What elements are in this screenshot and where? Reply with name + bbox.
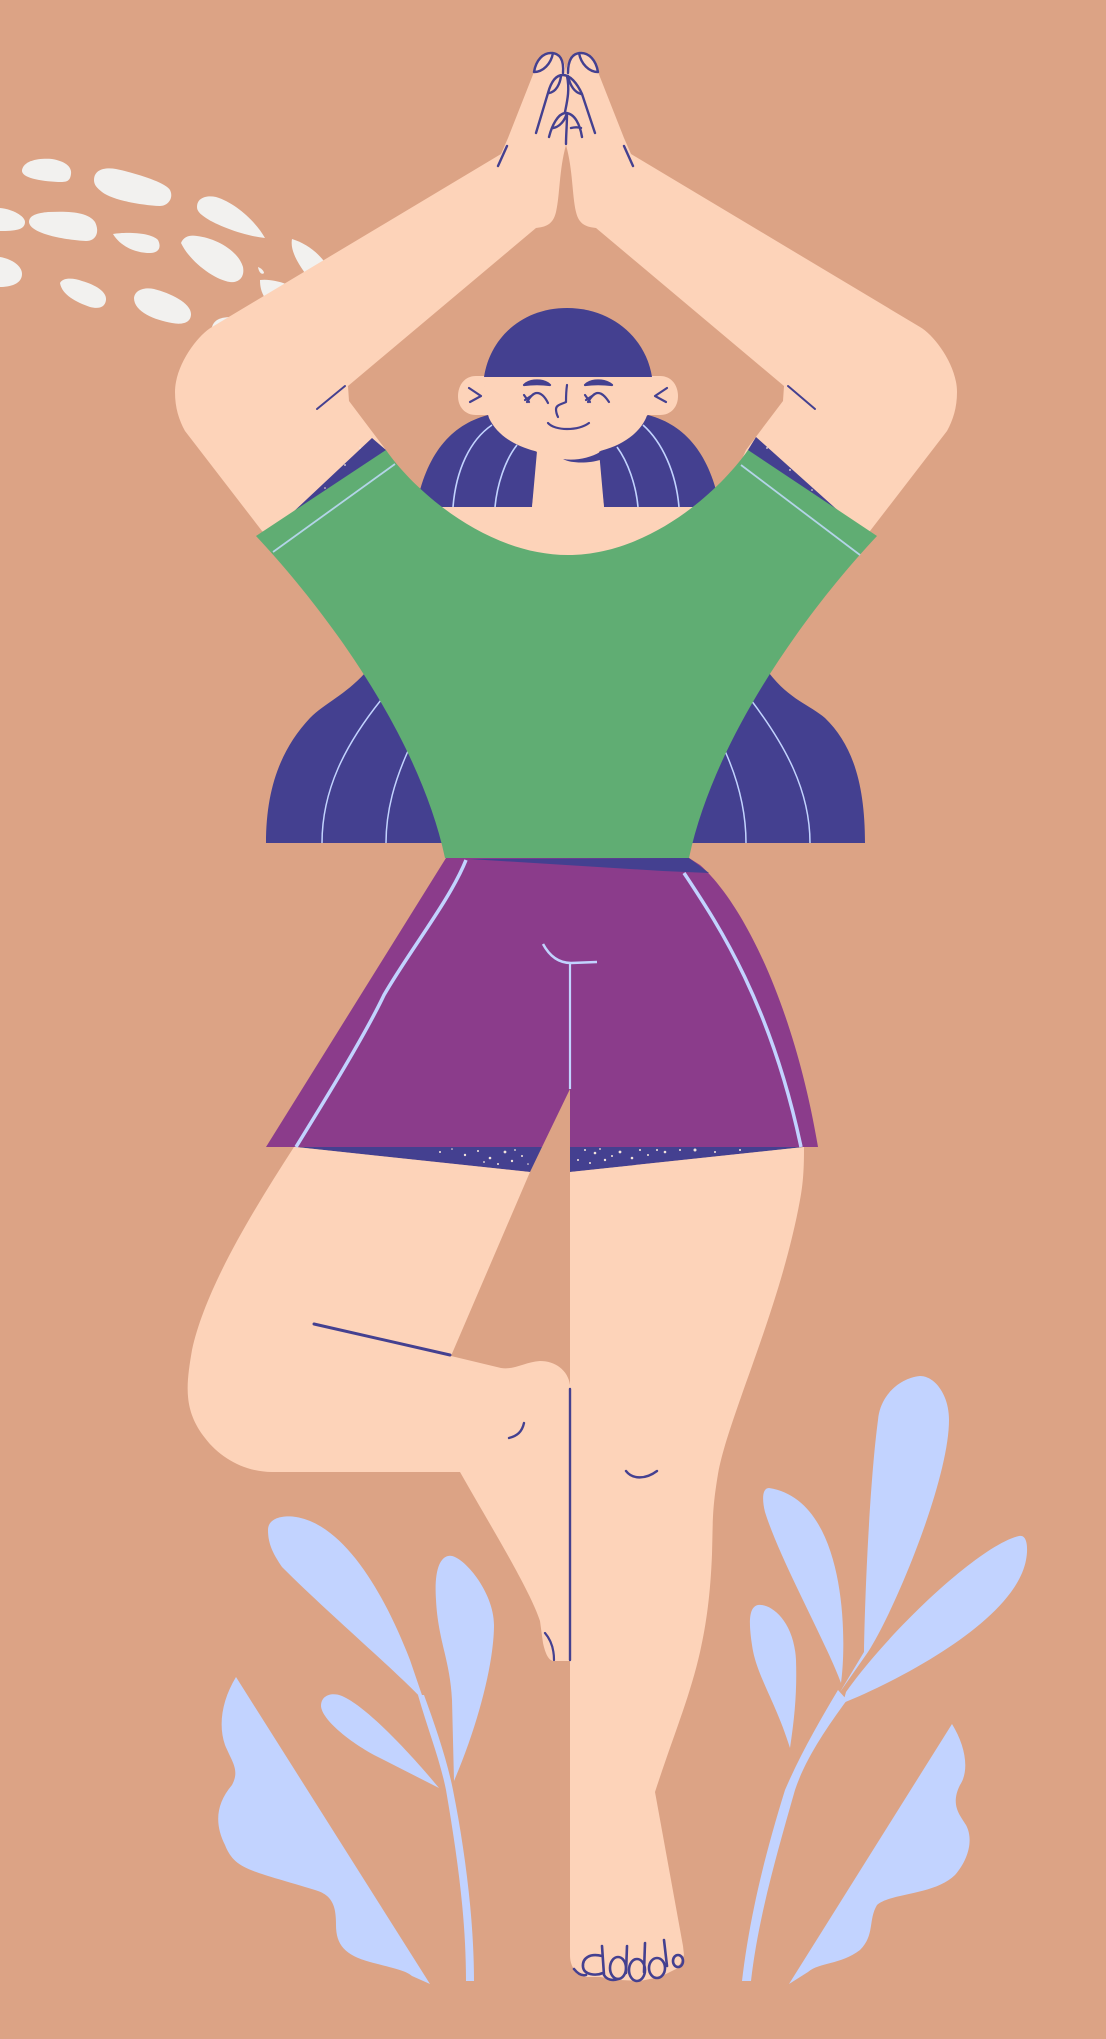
hair: under-chin shadow bbox=[563, 452, 600, 462]
undershorts: left bbox=[296, 1147, 542, 1172]
sleeve trim lines bbox=[273, 464, 860, 555]
shorts waistband bbox=[469, 858, 709, 873]
undershorts: right bbox=[570, 1147, 804, 1172]
face bbox=[484, 376, 652, 455]
hair: fringe dome bbox=[484, 308, 652, 377]
hair: lower hair lengths bbox=[266, 673, 865, 843]
facial features bbox=[469, 380, 667, 429]
stem bbox=[418, 1695, 474, 1981]
ear: right bbox=[644, 376, 678, 415]
splatter: white brush dabs bbox=[0, 159, 326, 334]
hair: upper side hair bbox=[416, 415, 720, 507]
shirt underside sliver: right bbox=[748, 437, 843, 515]
green t-shirt bbox=[256, 450, 877, 858]
leaf: tall bbox=[840, 1376, 949, 1692]
leaf: top right bbox=[436, 1556, 494, 1781]
leaf: large lower-right bbox=[789, 1724, 970, 1984]
leaf: top large bbox=[268, 1516, 424, 1701]
shorts stripes bbox=[296, 860, 801, 1147]
stem bbox=[742, 1690, 847, 1981]
elbow crease lines bbox=[317, 386, 815, 409]
standing leg bbox=[570, 1147, 804, 1981]
left arm with hand bbox=[175, 53, 566, 560]
leaf: right bbox=[843, 1536, 1027, 1703]
neck and chest bbox=[436, 440, 700, 570]
leaf: small bbox=[750, 1605, 796, 1748]
plant: left bbox=[218, 1516, 494, 1984]
white specks on undershorts and sliver bbox=[324, 447, 813, 1165]
shirt underside sliver: left bbox=[290, 438, 386, 515]
hand lines: fingers bbox=[498, 53, 633, 166]
leg lines: thigh, knee, toes bbox=[314, 1324, 683, 1981]
bent leg bbox=[188, 1147, 570, 1661]
right arm with hand bbox=[566, 53, 957, 560]
leaf: left bbox=[763, 1488, 843, 1683]
ear: left bbox=[458, 376, 492, 415]
leaf: small bbox=[321, 1694, 439, 1788]
purple shorts bbox=[266, 858, 818, 1147]
plant: right bbox=[742, 1376, 1027, 1984]
leaf: large lower-left bbox=[218, 1677, 430, 1984]
